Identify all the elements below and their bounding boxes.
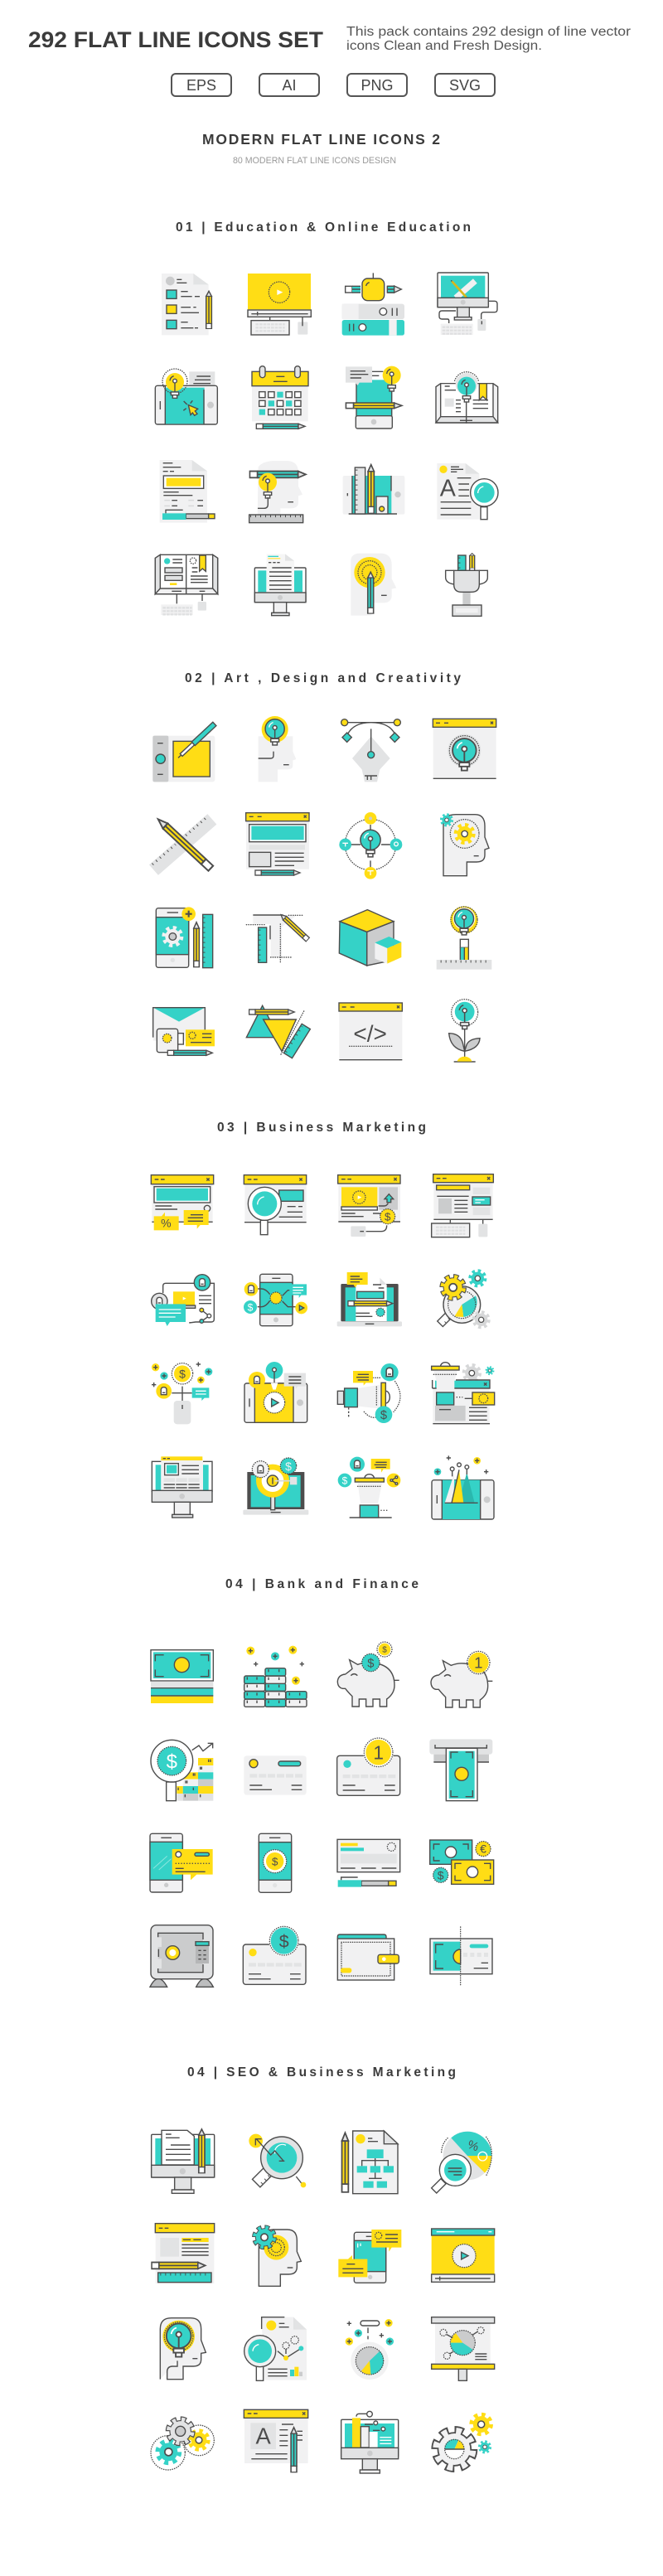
icon: megaphone <box>337 1363 400 1423</box>
icon: checklist document with pencil <box>162 274 211 335</box>
icon: magnifier over coin stacks <box>151 1740 213 1801</box>
main heading: MODERN FLAT LINE ICONS 2 <box>202 131 440 148</box>
icon: monitor with document and pencil <box>152 2129 215 2193</box>
icon: head with teal bulb <box>259 716 296 782</box>
icon: bulb orbit of tools <box>339 812 402 879</box>
icon: document with letter A and magnifier: A <box>440 475 457 501</box>
icon: video player <box>432 2229 495 2282</box>
icon: search gears analysis <box>438 1271 488 1327</box>
icon: pie chart and magnifier: % <box>466 2138 481 2154</box>
icon: funnel, window and gears <box>432 1363 495 1424</box>
badge: EPS <box>172 74 231 96</box>
icon: gears with chart <box>437 2415 491 2467</box>
icon: banknote and card split <box>430 1927 492 1987</box>
icon: magnifier over network report <box>244 2317 307 2380</box>
icon: phone with gear, pencil and ruler <box>156 907 213 968</box>
icon: bulb and ruler <box>437 906 491 970</box>
icon: credit card with coin <box>337 1737 400 1795</box>
icon: head with gear and target <box>254 2228 301 2286</box>
section heading 01: 01 | Education & Online Education <box>176 220 471 235</box>
icon: code window <box>339 1003 402 1060</box>
icon: magnifier with trend arrow <box>249 2134 306 2187</box>
badge: PNG: PNG <box>361 77 394 94</box>
icon: sitemap document and pencil <box>342 2131 398 2194</box>
icon: three gears <box>151 2420 214 2470</box>
icon: monitor with crossed pencil and ruler <box>438 273 497 335</box>
icon: laptop target and people <box>243 1458 308 1515</box>
icon: currency notes and coins: € <box>480 1842 486 1856</box>
icon: banknotes <box>151 1650 213 1703</box>
icon: monitor with document <box>254 554 306 616</box>
icon: phone with pencil, bulb and speech <box>346 366 402 429</box>
icon: web page layout <box>246 813 309 875</box>
icon: currency notes and coins <box>430 1840 494 1884</box>
icon: head with gears <box>442 815 489 876</box>
icon: head, bulb, pencil and ruler <box>249 461 306 523</box>
icon: phone with coin <box>259 1833 292 1892</box>
section 5 icon grid: seo and marketing <box>151 2129 495 2473</box>
section 1 icon grid: education <box>155 273 498 616</box>
icon: web page with video and dollar: $ <box>385 1211 391 1223</box>
icon: bank cheque and pen <box>337 1839 400 1887</box>
icon: graphics tablet and stylus <box>152 722 216 782</box>
icon: phone with messages <box>338 2230 401 2283</box>
icon: funnel marketing channels <box>338 1457 400 1518</box>
icon: credit card with dollar coin: $ <box>279 1931 289 1951</box>
icon: apple pencils and books <box>342 273 404 336</box>
badge: SVG: SVG <box>449 77 481 94</box>
icon: megaphone: $ <box>380 1409 387 1422</box>
icon: laptop target and people: $ <box>285 1460 292 1473</box>
icon: magnifier over coin stacks: $ <box>167 1750 177 1773</box>
description text: icons Clean and Fresh Design. <box>346 39 542 53</box>
icon: head with bulb <box>160 2318 206 2380</box>
icon: money, person, mouse <box>152 1362 212 1424</box>
icon: piggy bank with number coin <box>431 1651 492 1707</box>
icon: phone connected channels <box>244 1274 307 1326</box>
icon: window with bulb <box>433 719 496 779</box>
icon: pie chart and magnifier <box>432 2132 491 2193</box>
icon: currency notes and coins: $ <box>438 1869 444 1882</box>
icon: bulb growing plant <box>449 1000 480 1062</box>
icon: open book with bulb <box>436 372 498 424</box>
icon: credit card with coin: 1 <box>373 1742 384 1764</box>
section heading 04 bank and finance: 04 | Bank and Finance <box>225 1577 419 1591</box>
icon: tablet with mountains <box>432 1455 494 1519</box>
icon: funnel marketing channels: $ <box>342 1475 348 1487</box>
icon: tablet with ruler and pencil <box>343 465 404 515</box>
icon: piggy bank with number coin: 1 <box>474 1654 483 1672</box>
title: 292 FLAT LINE ICONS SET <box>28 27 324 52</box>
icon: tablet with idea bulb and cursor <box>155 369 217 424</box>
icon: monitor with bar chart <box>341 2411 399 2473</box>
icon: document with letter A and magnifier <box>437 463 498 520</box>
icon: phone with coin: $ <box>272 1856 278 1868</box>
section 4 icon grid: bank and finance <box>150 1642 494 1987</box>
icon: code window: </> <box>353 1020 387 1046</box>
icon: cube <box>339 910 401 966</box>
icon: piggy bank with coins <box>337 1642 399 1707</box>
icon: piggy bank with coins: $ <box>367 1657 374 1670</box>
icon: open book with keyboard <box>155 554 218 615</box>
icon: phone and card message <box>150 1833 213 1892</box>
icon: safe <box>150 1925 213 1987</box>
sub heading: 80 MODERN FLAT LINE ICONS DESIGN <box>233 156 396 166</box>
icon: tablet with video and bulb <box>244 1362 307 1422</box>
icon: piggy bank with coins: $ <box>382 1646 387 1655</box>
section heading 03: 03 | Business Marketing <box>217 1121 426 1135</box>
icon: envelope, mug and card <box>153 1008 215 1055</box>
icon: presentation board <box>432 2317 495 2380</box>
description text: This pack contains 292 design of line vector <box>346 25 631 39</box>
section 3 icon grid: business marketing <box>151 1174 495 1519</box>
section 2 icon grid: art and design <box>149 716 496 1062</box>
badge: SVG <box>435 74 495 96</box>
icon: laptop with article and pencil <box>337 1272 402 1326</box>
icon: web page with magnifier <box>244 1175 307 1235</box>
icon: web page with discount: % <box>161 1217 172 1230</box>
icon: chat bubbles and share <box>152 1275 214 1326</box>
icon: drafting tools <box>246 913 309 963</box>
description text <box>346 25 631 53</box>
icon: coin stacks <box>244 1646 307 1707</box>
icon: wallet <box>337 1934 399 1980</box>
icon: pen tool bezier <box>341 719 400 782</box>
icon: credit card with dollar coin <box>243 1925 306 1984</box>
badge: AI: AI <box>282 77 297 94</box>
icon: trophy with ruler and pencil <box>446 554 487 616</box>
icon: web page with video and dollar <box>338 1175 400 1237</box>
icon: typography window with pencil: A <box>256 2423 272 2448</box>
icon: phone connected channels: $ <box>248 1301 254 1313</box>
format badges <box>172 74 495 96</box>
icon: desktop web page <box>432 1174 493 1237</box>
icon: web article with pencil and ruler <box>152 2224 215 2283</box>
badge: EPS: EPS <box>186 77 216 94</box>
icon: web page with discount <box>151 1175 214 1230</box>
icon: document with pen <box>160 460 215 523</box>
badge: PNG <box>347 74 407 96</box>
badge: AI <box>259 74 319 96</box>
icon: credit card <box>244 1755 307 1795</box>
section heading 05 seo: 04 | SEO & Business Marketing <box>187 2065 456 2080</box>
icon: typography window with pencil <box>244 2409 308 2472</box>
icon: stopwatch pie <box>346 2319 394 2380</box>
icon: crossed pencil and ruler <box>149 814 216 875</box>
icon: money, person, mouse: $ <box>179 1368 186 1381</box>
icon: monitor with web page <box>152 1456 212 1518</box>
icon: ATM cash <box>429 1739 492 1801</box>
icon: calendar and pencil <box>252 366 308 429</box>
section heading 02: 02 | Art , Design and Creativity <box>185 671 461 685</box>
icon: head with target and pencil <box>351 554 396 616</box>
icon: triangles, pencil and ruler <box>246 1005 310 1058</box>
icon: video lesson computer <box>248 274 311 335</box>
